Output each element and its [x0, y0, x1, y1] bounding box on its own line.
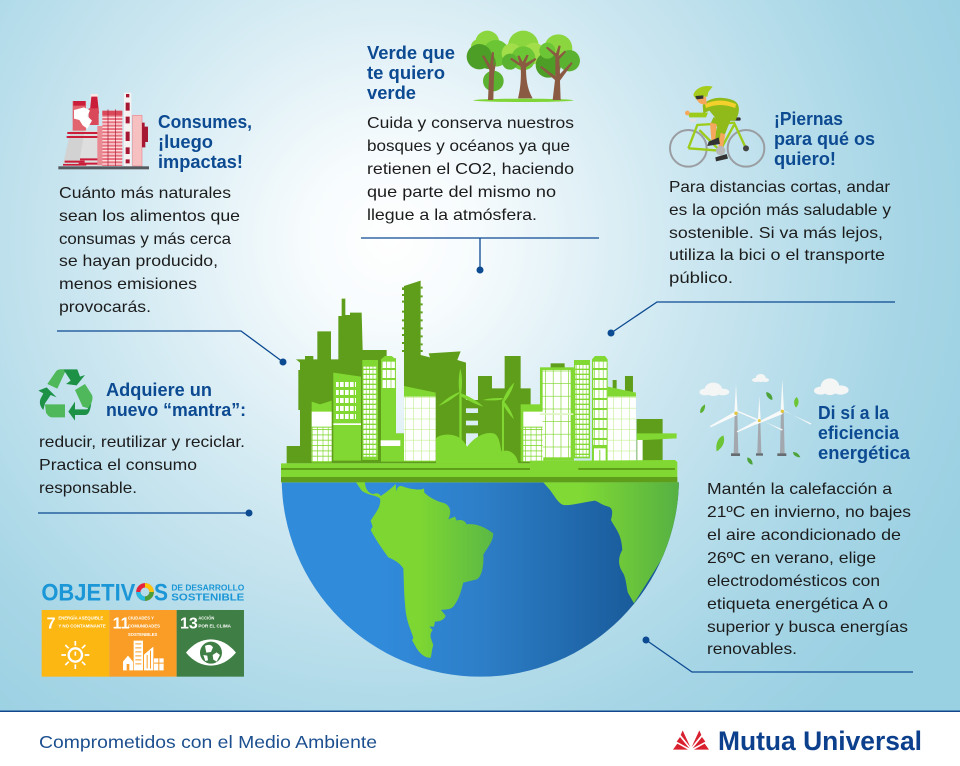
text: verde: Cuida y conserva nuestros — [367, 115, 574, 132]
icon: trees — [467, 31, 580, 102]
heading: eficiencia — [818, 402, 911, 463]
title: objetivos: DE DESARROLLO — [171, 582, 245, 592]
connector: piernas — [608, 302, 895, 336]
connector: consumes — [57, 331, 286, 366]
text: eficiencia: el aire acondicionado de — [707, 527, 901, 544]
text: verde: retienen el CO2, haciendo — [367, 161, 574, 178]
heading: eficiencia: energética — [818, 442, 911, 463]
heading: mantra — [106, 379, 246, 420]
footer — [0, 710, 960, 766]
heading: mantra: nuevo “mantra”: — [106, 399, 246, 420]
land: south america — [356, 482, 493, 658]
goal 7: Y NO CONTAMINANTE — [58, 624, 106, 630]
text: eficiencia: superior y busca energías — [707, 619, 908, 636]
text: consumes: provocarás. — [59, 299, 151, 316]
text: consumes — [59, 185, 240, 316]
goal 7: 7 — [47, 615, 56, 632]
text: eficiencia: 21ºC en invierno, no bajes — [707, 504, 911, 521]
trees and bushes — [436, 433, 518, 463]
logo: mutua universal wordmark: Mutua Universal — [718, 726, 922, 756]
text: piernas: utiliza la bici o el transporte — [669, 247, 885, 264]
sdg logo — [41, 579, 245, 677]
goal 11: SOSTENIBLES — [128, 632, 158, 638]
platform — [281, 460, 677, 482]
text: eficiencia: 26ºC en verano, elige — [707, 550, 876, 567]
text: mantra: Practica el consumo — [39, 457, 197, 474]
text: consumes: sean los alimentos que — [59, 208, 240, 225]
text: verde: llegue a la atmósfera. — [367, 207, 537, 224]
logo: mutua universal mark — [673, 730, 709, 750]
goal 13 — [177, 610, 244, 677]
wind turbine left — [439, 369, 483, 444]
light buildings — [312, 356, 677, 463]
heading: consumes — [158, 111, 252, 172]
text: mantra: responsable. — [39, 480, 137, 497]
icon: recycle — [38, 369, 93, 421]
globe — [280, 482, 680, 682]
text: verde: que parte del mismo no — [367, 184, 556, 201]
text: verde: bosques y océanos ya que — [367, 138, 570, 155]
panel: eficiencia — [699, 374, 911, 658]
text: piernas: público. — [669, 270, 733, 287]
text: eficiencia: etiqueta energética A o — [707, 596, 888, 613]
heading: piernas: para qué os — [774, 128, 875, 149]
goal 11: COMUNIDADES — [128, 624, 161, 630]
windows — [312, 412, 332, 427]
icon: wind turbines — [699, 374, 849, 465]
heading: eficiencia: Di sí a la — [818, 402, 890, 423]
goal 11 — [109, 610, 177, 677]
heading: consumes: impactas! — [158, 151, 243, 172]
title: objetivos — [41, 579, 245, 606]
goal 7 — [42, 610, 109, 677]
text: piernas: sostenible. Si va más lejos, — [669, 225, 883, 242]
icon: factory — [58, 93, 149, 169]
heading: mantra: Adquiere un — [106, 379, 212, 400]
panel: verde — [367, 31, 580, 224]
heading: verde: Verde que — [367, 42, 455, 63]
title: objetivos: SOSTENIBLE — [171, 593, 244, 604]
dark silhouettes — [287, 281, 663, 463]
text: consumes: Cuánto más naturales — [59, 185, 231, 202]
heading: eficiencia: eficiencia — [818, 422, 900, 443]
background gaps — [466, 408, 478, 413]
connector: mantra — [38, 510, 252, 516]
heading: piernas: quiero! — [774, 148, 836, 169]
text: mantra: reducir, reutilizar y reciclar. — [39, 434, 245, 451]
text: eficiencia: Mantén la calefacción a — [707, 481, 892, 498]
heading: verde — [367, 42, 455, 103]
heading: verde: te quiero — [367, 62, 445, 83]
title: objetivos: OBJETIV — [41, 579, 135, 606]
text: piernas: Para distancias cortas, andar — [669, 179, 891, 196]
text: consumes: se hayan producido, — [59, 253, 218, 270]
text: eficiencia — [707, 481, 911, 658]
text: eficiencia: electrodomésticos con — [707, 573, 880, 590]
heading: consumes: ¡luego — [158, 131, 213, 152]
goal 13: POR EL CLIMA — [198, 624, 231, 630]
land: africa — [543, 482, 680, 603]
icon: cyclist — [670, 86, 764, 167]
text: eficiencia: renovables. — [707, 641, 797, 658]
heading: verde: verde — [367, 82, 416, 103]
sdg wheel — [138, 585, 152, 599]
heading: consumes: Consumes, — [158, 111, 252, 132]
text: consumes: consumas y más cerca — [59, 231, 231, 248]
text: piernas: es la opción más saludable y — [669, 202, 891, 219]
panel: piernas — [669, 86, 891, 287]
connector: verde — [361, 238, 599, 274]
goal 13: ACCIÓN — [198, 613, 215, 621]
panel: consumes — [58, 93, 252, 316]
goal 7: ENERGÍA ASEQUIBLE — [58, 613, 104, 621]
footer tagline: Comprometidos con el Medio Ambiente — [39, 732, 377, 752]
connector: eficiencia — [642, 636, 913, 672]
city skyline — [281, 281, 677, 482]
goal 11: CIUDADES Y — [128, 615, 155, 621]
title: objetivos: S — [154, 579, 168, 606]
wind turbine right — [483, 383, 514, 452]
panel: mantra — [38, 369, 246, 497]
heading: piernas: ¡Piernas — [774, 108, 843, 129]
text: mantra — [39, 434, 245, 497]
text: piernas — [669, 179, 891, 287]
heading: piernas — [774, 108, 875, 169]
goal 11: 11 — [113, 615, 130, 632]
text: verde — [367, 115, 574, 224]
text: consumes: menos emisiones — [59, 276, 197, 293]
goal 13: 13 — [180, 615, 198, 632]
